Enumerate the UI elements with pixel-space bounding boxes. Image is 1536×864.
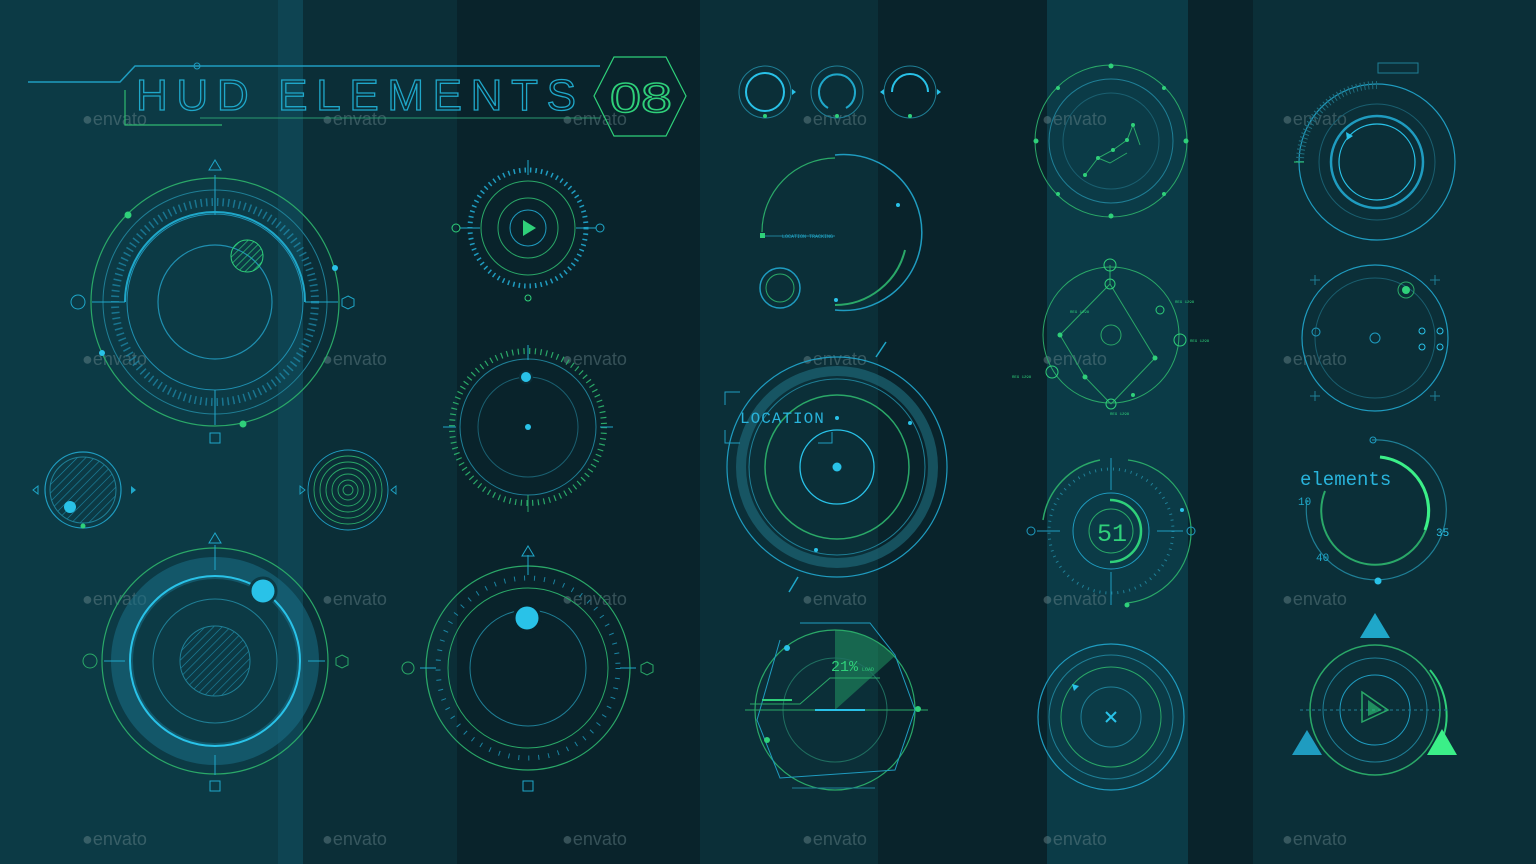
widget: location radar [725,342,947,592]
widget: load pie: LOAD [862,667,874,673]
widget: elements gauge [1298,437,1449,584]
widget: dot compass [1302,265,1448,411]
widget: load pie [745,623,928,790]
widget: elements gauge: 40 [1316,553,1329,565]
watermarks: ●envato [1042,829,1107,849]
widget: counter 51: 51 [1097,520,1127,549]
widget: star map [1034,64,1188,218]
widget: tick dial middle [443,345,613,512]
watermarks: ●envato [562,109,627,129]
widget: arc tracker [760,154,922,310]
watermarks: ●envato [322,589,387,609]
watermarks: ●envato [802,349,867,369]
widget: arc tracker: LOCATION TRACKING [782,234,833,240]
watermarks: ●envato [322,829,387,849]
widget: play target [452,160,604,301]
watermarks: ●envato [1042,349,1107,369]
widget: glowing dial bottom-left [83,533,348,791]
widget: large dial bottom-middle [402,546,653,791]
watermarks: ●envato [802,829,867,849]
watermarks: ●envato [562,829,627,849]
widget: load pie: 21% [831,659,859,676]
widget: network map: REG 1298 [1190,340,1210,344]
widget: elements gauge: 10 [1298,497,1311,509]
title [28,57,686,136]
title: 08 [610,74,672,121]
widget: counter 51 [1027,458,1195,608]
widget: concentric circles [300,450,396,530]
watermarks: ●envato [1282,109,1347,129]
widget: network map: REG 1298 [1012,376,1032,380]
watermarks: ●envato [82,349,147,369]
title: HUD ELEMENTS [136,71,576,120]
watermarks: ●envato [322,349,387,369]
watermarks: ●envato [802,589,867,609]
widget: elements gauge: 35 [1436,528,1449,540]
watermarks: ●envato [82,589,147,609]
widget: crosshair circle [1038,644,1184,790]
widget: network map [1012,259,1210,417]
widget: triangle radar [1292,613,1457,775]
widget: network map: REG 1298 [1175,301,1195,305]
watermarks: ●envato [82,829,147,849]
watermarks: ●envato [1282,589,1347,609]
watermarks: ●envato [322,109,387,129]
watermarks: ●envato [1042,109,1107,129]
widget: elements gauge: elements [1300,469,1391,491]
watermarks: ●envato [1282,829,1347,849]
watermarks: ●envato [1042,589,1107,609]
watermarks: ●envato [1282,349,1347,369]
watermarks: ●envato [802,109,867,129]
widget: location radar: LOCATION [740,410,825,428]
widget: small hatched circle left [33,452,136,528]
watermarks: ●envato [562,349,627,369]
watermarks: ●envato [82,109,147,129]
widget: big dial top-left [71,160,354,443]
watermarks: ●envato [562,589,627,609]
widget: network map: REG 1298 [1070,311,1090,315]
watermarks [82,109,1347,849]
widget: spiral ring top-right [1294,63,1455,240]
widget: three small rings [739,66,941,118]
widget: network map: REG 1298 [1110,413,1130,417]
